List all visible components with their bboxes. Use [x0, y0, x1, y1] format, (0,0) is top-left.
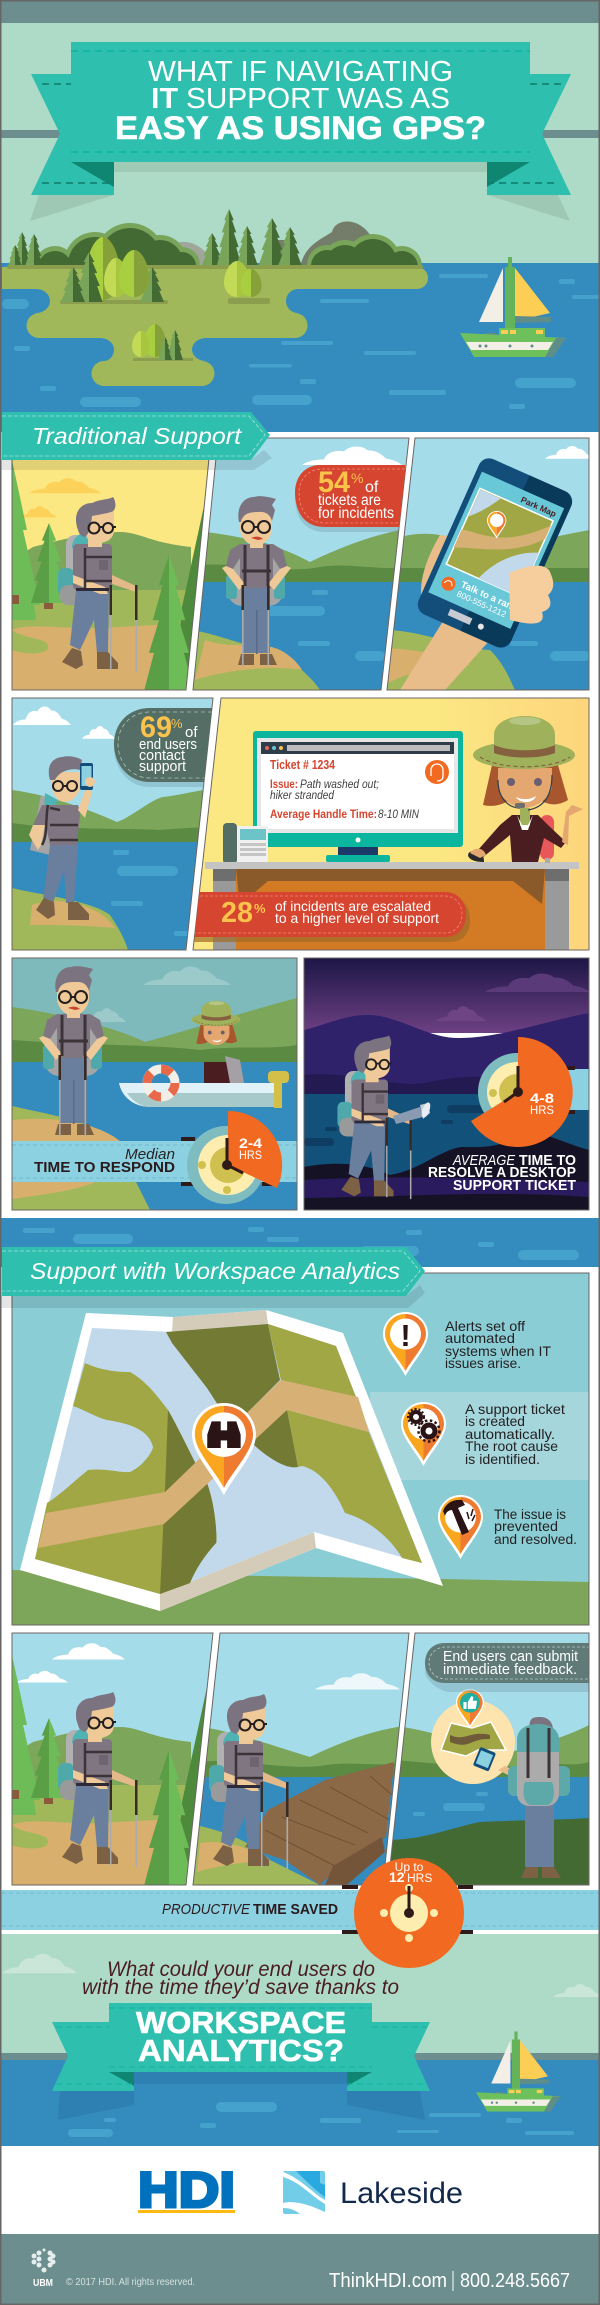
- panel A: hiker on trail: [12, 460, 208, 690]
- alert text: issues arise.: [445, 1355, 521, 1371]
- callout: immediate feedback: immediate feedback.: [443, 1661, 577, 1678]
- callout: immediate feedback: End users can submit: [443, 1648, 579, 1665]
- callout: 69% of end users contact support: contact: [139, 748, 185, 764]
- panel D: hiker calling on phone: [12, 698, 217, 950]
- callout: 54% of tickets are for incidents: %: [351, 470, 363, 486]
- rescue boat: [119, 1001, 289, 1108]
- flashlight: [393, 1101, 432, 1124]
- top band: [0, 0, 600, 23]
- title banner: [30, 42, 571, 221]
- website and phone: 800.248.5667: [460, 2270, 570, 2292]
- clock 2-4 hrs: [181, 1111, 282, 1204]
- title text: IT: [151, 83, 178, 115]
- callout: 69% of end users contact support: support: [139, 759, 186, 775]
- callout: 54% of tickets are for incidents: tickets are: [318, 492, 381, 509]
- ranger at desk: [468, 716, 583, 863]
- clock: up to 12 hrs: Up to: [395, 1860, 424, 1874]
- pin: alert: !: [400, 1318, 411, 1353]
- computer monitor: Ticket # 1234: [270, 758, 335, 772]
- panel C: phone with park map: [385, 438, 595, 690]
- clock 4-8 hrs: [471, 1037, 575, 1147]
- callout: 69% of end users contact support: [114, 708, 215, 787]
- resolve text: and resolved.: [494, 1531, 577, 1547]
- ribbon: productive time saved: [0, 1890, 600, 1930]
- ticket text: is created: [465, 1413, 525, 1429]
- resolve time caption: RESOLVE A DESKTOP: [428, 1164, 576, 1181]
- UBM logo: UBM: [33, 2278, 53, 2289]
- small sailboat: [476, 2032, 561, 2112]
- clock: up to 12 hrs: 12: [389, 1869, 405, 1885]
- phone map pin: [487, 511, 506, 539]
- feedback illustration: [431, 1689, 520, 1784]
- clock: up to 12 hrs: HRS: [407, 1871, 432, 1885]
- clock 2-4 hrs: HRS: [239, 1148, 262, 1162]
- Lakeside logo: [283, 2171, 463, 2214]
- callout: 28% escalated: [190, 892, 470, 942]
- closing question: [82, 1958, 399, 1999]
- mid water divider: [0, 1218, 600, 1267]
- ticket text: is identified.: [465, 1451, 540, 1467]
- closing banner: ANALYTICS?: [138, 2033, 344, 2068]
- pin: gears: [401, 1402, 446, 1466]
- callout: 28% escalated: of incidents are escalated: [275, 898, 431, 914]
- section banner: traditional support: [0, 412, 272, 470]
- section banner: traditional support: Traditional Support: [32, 423, 243, 449]
- Lakeside logo: Lakeside: [340, 2177, 463, 2210]
- title text: WHAT IF NAVIGATING: [148, 56, 453, 88]
- ribbon: productive time saved: TIME SAVED: [253, 1902, 338, 1918]
- lower sky: [0, 1934, 600, 2056]
- folded trail map: [20, 1310, 443, 1611]
- panel H: hiker on trail: [12, 1633, 217, 1886]
- panel F: median time to respond: [12, 958, 297, 1210]
- computer monitor: Issue:: [270, 777, 298, 791]
- sailboat: [460, 257, 566, 357]
- ticket text: automatically.: [465, 1426, 555, 1442]
- logos strip: [0, 2146, 600, 2234]
- alert text: systems when IT: [445, 1343, 551, 1359]
- ticket text: The root cause: [465, 1438, 558, 1454]
- computer monitor: Path washed out;: [300, 779, 379, 791]
- resolve time caption: AVERAGE: [452, 1152, 516, 1169]
- closing question: What could your end users do: [107, 1958, 375, 1981]
- desk phone: [223, 823, 268, 864]
- island landscape: [2, 209, 428, 386]
- callout: 54% of tickets are for incidents: for incidents: [318, 505, 394, 522]
- panel F: median time to respond: Median: [125, 1146, 175, 1163]
- callout: 54% of tickets are for incidents: 54: [318, 466, 350, 499]
- resolve time caption: [428, 1155, 576, 1190]
- computer monitor: 8-10 MIN: [378, 809, 420, 821]
- callout: 69% of end users contact support: %: [171, 716, 183, 731]
- panel C: phone with park map: 800-555-1212: [455, 589, 508, 619]
- callout: 28% escalated: 28: [221, 897, 253, 929]
- computer monitor: [253, 731, 463, 862]
- closing banner: WORKSPACE: [136, 2005, 346, 2040]
- lower horizon: [0, 2053, 600, 2060]
- white section: workspace analytics: [0, 1267, 600, 1934]
- callout: 28% escalated: %: [254, 901, 266, 916]
- ticket text: [465, 1401, 565, 1467]
- section banner: workspace analytics: Support with Workspace Analytics: [30, 1258, 401, 1284]
- callout: 69% of end users contact support: 69: [140, 711, 172, 744]
- panel C: phone with park map: Park Map: [519, 494, 558, 519]
- panel E: ranger help desk: [190, 698, 590, 950]
- callout: 69% of end users contact support: end users: [139, 737, 197, 753]
- horizon strip: [0, 130, 600, 138]
- website and phone: [329, 2270, 570, 2292]
- lower clouds: [2, 1954, 600, 1997]
- panel I: hiker at the bridge: [190, 1633, 410, 1885]
- panel: map: [12, 1273, 589, 1625]
- resolve text: The issue is: [494, 1506, 566, 1522]
- HDI logo: HDI: [138, 2162, 235, 2218]
- clock 4-8 hrs: HRS: [530, 1103, 554, 1117]
- panel B: hiker by the lake: [190, 438, 410, 690]
- callout: 54% of tickets are for incidents: of: [365, 479, 379, 496]
- computer monitor: hiker stranded: [270, 790, 335, 802]
- callout: 28% escalated: to a higher level of support: [275, 910, 439, 926]
- title text: SUPPORT WAS AS: [186, 83, 450, 115]
- title text: EASY AS USING GPS?: [115, 110, 486, 146]
- back view hiker: [508, 1717, 570, 1878]
- title text: [115, 56, 486, 146]
- panel C: phone with park map: Talk to a ranger!: [459, 579, 530, 619]
- resolve text: prevented: [494, 1518, 558, 1534]
- alert text: Alerts set off: [445, 1318, 525, 1334]
- clock 4-8 hrs: 4-8: [530, 1090, 554, 1106]
- clock: up to 12 hrs: [342, 1858, 473, 1968]
- alert text: automated: [445, 1330, 515, 1346]
- pin: alert: [383, 1312, 428, 1376]
- UBM logo: [32, 2248, 56, 2289]
- ticket text: A support ticket: [465, 1401, 565, 1417]
- closing question: with the time they’d save thanks to: [82, 1976, 399, 1999]
- panel J: feedback from end user: [385, 1633, 590, 1885]
- computer monitor: Average Handle Time:: [270, 807, 377, 821]
- website and phone: ThinkHDI.com: [329, 2270, 447, 2292]
- ribbon: productive time saved: PRODUCTIVE: [162, 1902, 250, 1918]
- desk: [205, 862, 579, 950]
- section banner: workspace analytics: [0, 1247, 425, 1308]
- sea with ripples: [0, 263, 600, 433]
- white section: traditional support: [0, 432, 600, 1218]
- resolve time caption: SUPPORT TICKET: [453, 1177, 576, 1194]
- panel F: median time to respond: TIME TO RESPOND: [34, 1159, 175, 1176]
- sky: [0, 23, 600, 268]
- lower sea: [0, 2060, 600, 2146]
- callout: 54% of tickets are for incidents: [295, 465, 405, 532]
- panel G: average time to resolve: [304, 958, 590, 1210]
- copyright: © 2017 HDI. All rights reserved.: [66, 2277, 195, 2288]
- closing banner: [52, 2003, 430, 2120]
- resolve time caption: TIME TO: [519, 1152, 576, 1169]
- callout: 69% of end users contact support: of: [185, 724, 198, 741]
- callout: immediate feedback: [425, 1643, 590, 1692]
- pin: hammer: [438, 1495, 483, 1559]
- resolve text: [494, 1506, 577, 1547]
- clock 2-4 hrs: 2-4: [239, 1135, 262, 1151]
- footer: [0, 2234, 600, 2305]
- pin: binoculars: [192, 1403, 256, 1495]
- alert text: [445, 1318, 551, 1371]
